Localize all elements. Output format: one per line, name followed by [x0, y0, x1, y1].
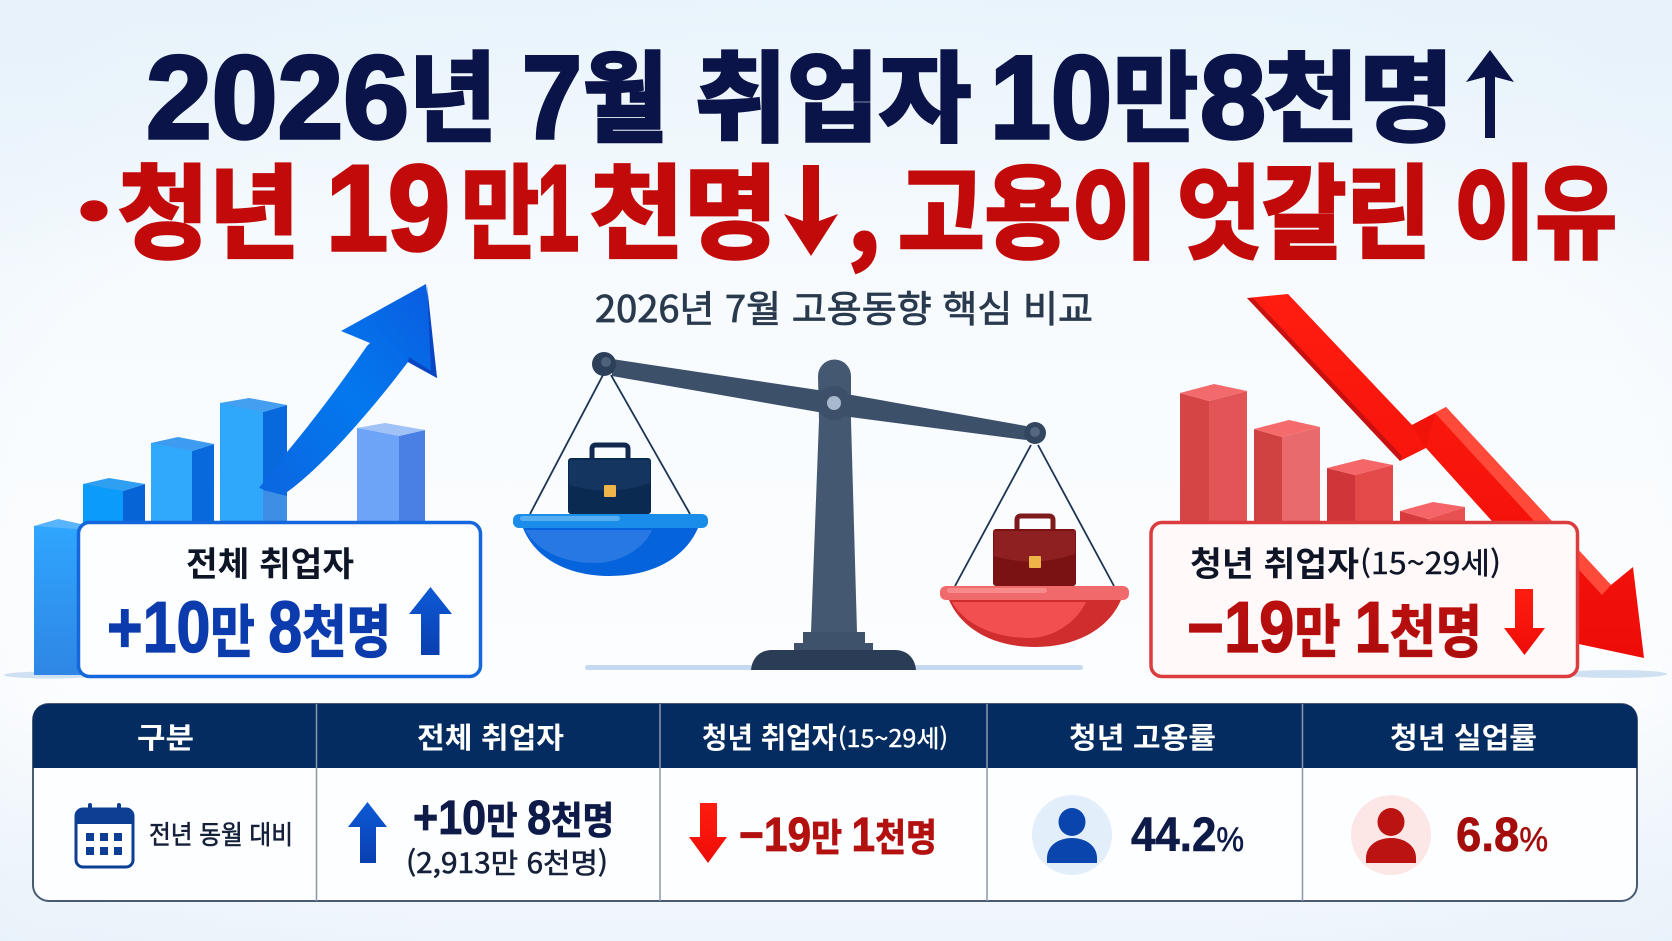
card: youth employment: 청년 취업자 — [1190, 537, 1359, 586]
title arrow down — [784, 165, 838, 256]
left pivot — [592, 352, 616, 376]
title line 1: 10 — [990, 32, 1112, 164]
header labels: 청년 취업자 — [702, 715, 837, 757]
table header bar — [33, 704, 1637, 768]
title line 2: 이유 — [1454, 133, 1617, 280]
bar 4 — [220, 398, 287, 530]
icon: calendar — [76, 803, 133, 867]
right pivot — [1024, 422, 1046, 444]
card: total employment: 전체 취업자 — [186, 537, 354, 586]
card: youth employment: −19만 1천명 — [1187, 587, 1482, 669]
title line 1: 8 — [1200, 32, 1266, 164]
title line 1: 월 — [583, 20, 668, 162]
right briefcase — [993, 516, 1076, 586]
title line 1: 년 — [409, 20, 497, 162]
bar 3 — [151, 437, 214, 530]
bar 2 — [83, 478, 145, 530]
bar 1 — [1180, 384, 1247, 530]
balance scale — [513, 352, 1129, 670]
header labels — [137, 715, 1537, 757]
base — [751, 632, 916, 670]
title line 2: , — [848, 133, 880, 280]
title line 2: 19 — [326, 140, 450, 276]
left briefcase — [568, 445, 651, 514]
title line 1: 2026 — [146, 32, 409, 164]
title line 2: 만 — [461, 133, 539, 280]
title line 2: 천명 — [590, 133, 778, 280]
ground shadow left — [4, 672, 96, 678]
title line 2: 청년 — [118, 133, 300, 280]
title line 2: 1 — [537, 140, 579, 276]
total employment value: +10만 8천명 — [413, 790, 614, 845]
row label: 전년 동월 대비 — [149, 815, 293, 852]
header labels: 구분 — [137, 715, 194, 757]
title line 2: 엇갈린 — [1177, 133, 1431, 280]
bar 5 — [357, 423, 425, 530]
icon: person red — [1351, 795, 1431, 875]
title line 1: 천명 — [1264, 20, 1454, 162]
title arrow up — [1466, 50, 1514, 138]
title line 1 — [146, 20, 1454, 164]
panel: youth employment chart — [1151, 294, 1667, 678]
card: youth employment — [1151, 522, 1578, 676]
icon: up arrow — [409, 587, 452, 655]
title line 2: 고용이 — [898, 133, 1158, 280]
icon: down arrow — [1504, 589, 1545, 655]
youth unemployment rate: 6.8% — [1456, 809, 1548, 862]
title line 1: 7 — [522, 32, 582, 164]
beam — [612, 359, 1026, 440]
card: total employment: +10만 8천명 — [107, 587, 391, 669]
title line 1: 취업자 — [695, 20, 971, 162]
title line 2: · — [74, 140, 114, 273]
subtitle: 2026년 7월 고용동향 핵심 비교 — [595, 279, 1093, 333]
ground shadow right — [1563, 670, 1667, 678]
header labels: (15~29세) — [838, 719, 948, 754]
card: total employment — [78, 522, 480, 676]
bar 2 — [1254, 420, 1320, 530]
bar 4 — [1400, 502, 1465, 530]
bar 1 — [34, 519, 90, 675]
title line 1: 만 — [1113, 20, 1198, 162]
growth arrow up — [259, 284, 437, 495]
youth employment value: −19만 1천명 — [739, 807, 937, 862]
centre pivot — [817, 386, 851, 420]
post — [811, 360, 857, 632]
decline arrow down — [1247, 294, 1644, 658]
left pan — [513, 514, 708, 576]
header labels: 청년 실업률 — [1390, 715, 1537, 757]
header labels: 청년 고용률 — [1069, 715, 1216, 757]
youth employment rate: 44.2% — [1131, 809, 1244, 862]
left strings — [530, 375, 690, 514]
comparison table — [33, 704, 1637, 901]
icon: person blue — [1032, 795, 1112, 875]
icon: down arrow — [689, 803, 727, 863]
header labels: 전체 취업자 — [417, 715, 564, 757]
right strings — [955, 445, 1114, 586]
table frame — [33, 704, 1637, 901]
panel: total employment chart — [4, 284, 480, 678]
total employment value — [406, 790, 614, 882]
icon: up arrow — [348, 802, 387, 863]
card: youth employment: (15~29세) — [1360, 539, 1501, 583]
ground line — [585, 665, 1083, 670]
bar 3 — [1327, 459, 1393, 530]
right pan — [940, 586, 1129, 647]
total employment value: (2,913만 6천명) — [406, 842, 608, 882]
title line 2 — [74, 133, 1617, 280]
